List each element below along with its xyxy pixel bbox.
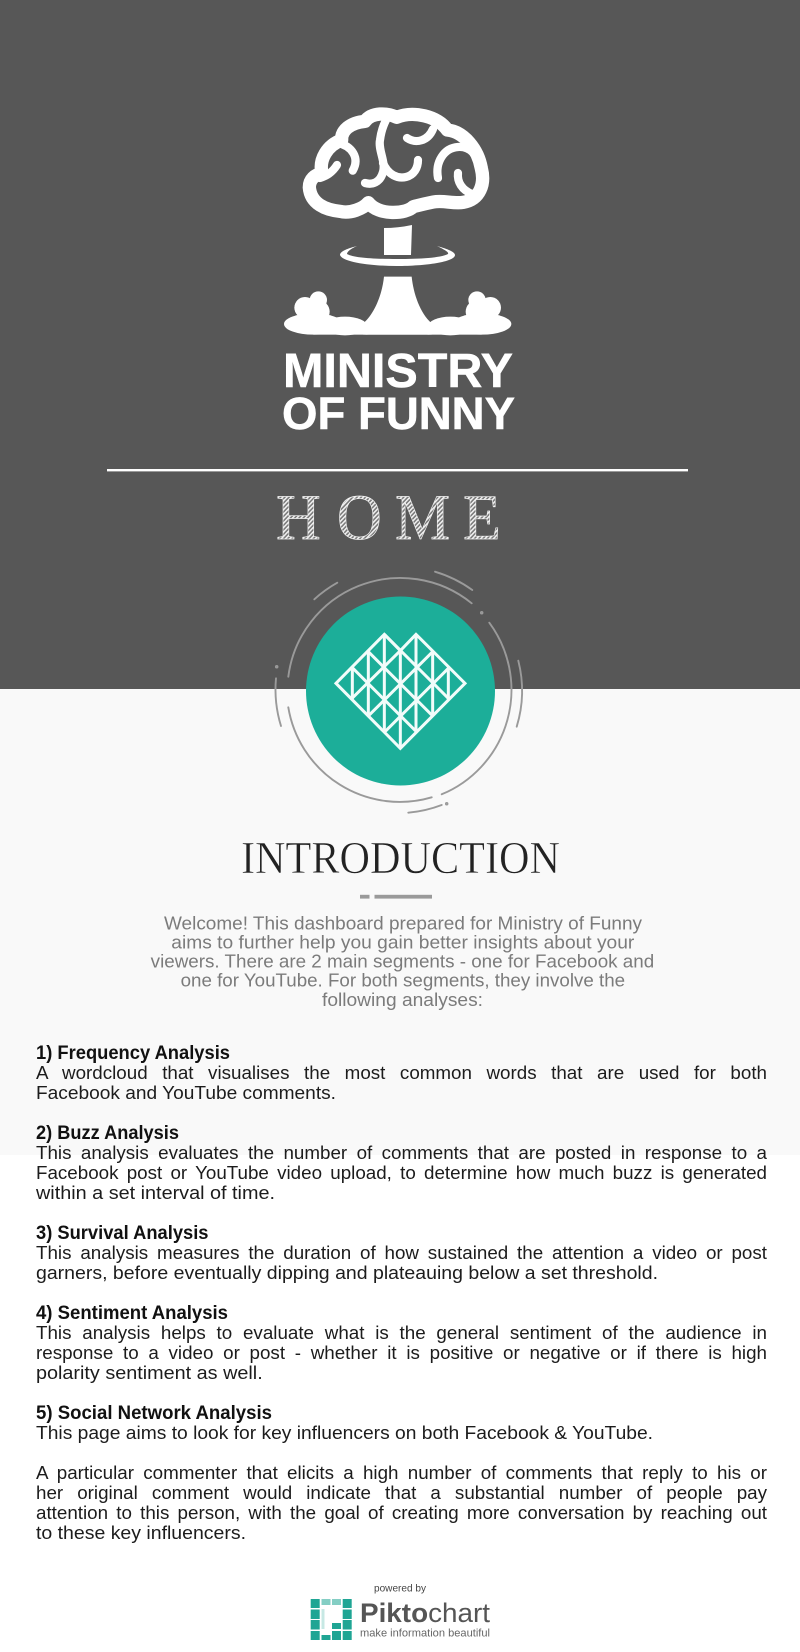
heading: HOME: HOME — [276, 481, 501, 553]
text block: key influencers paragraph — [36, 1463, 767, 1543]
panel: light background — [0, 689, 800, 1155]
tagline: make information beautiful — [360, 1628, 490, 1640]
logo text: OF FUNNY: OF FUNNY — [282, 388, 515, 439]
logo text: MINISTRY: MINISTRY — [283, 345, 513, 398]
text block: social network analysis: 5) Social Network Analysis — [36, 1403, 272, 1424]
text block: welcome paragraph — [151, 912, 654, 1010]
heading: INTRODUCTION: INTRODUCTION — [241, 832, 560, 883]
text block: sentiment analysis: 4) Sentiment Analysis — [36, 1303, 228, 1324]
panel: dark header background — [0, 0, 800, 689]
text block: sentiment analysis — [36, 1303, 767, 1383]
text block: frequency analysis: 1) Frequency Analysis — [36, 1043, 230, 1064]
icon: diamond lattice — [336, 634, 465, 748]
powered by label: powered by — [374, 1582, 427, 1594]
text block: buzz analysis: within a set interval of time. — [35, 1182, 275, 1203]
text block: frequency analysis: Facebook and YouTube comments. — [36, 1082, 336, 1103]
logo: Ministry of Funny — [282, 114, 515, 439]
icon: Piktochart mark — [311, 1599, 352, 1640]
text block: survival analysis: 3) Survival Analysis — [36, 1223, 208, 1244]
footer: Piktochart logo — [311, 1582, 491, 1640]
text block: welcome paragraph: aims to further help you gain better insights about your — [171, 932, 634, 952]
accent dashes — [360, 895, 432, 899]
text block: buzz analysis — [35, 1123, 767, 1203]
text block: welcome paragraph: one for YouTube. For both segments, they involve the — [181, 970, 625, 990]
text block: survival analysis: garners, before eventually dipping and plateauing below a set threshold. — [36, 1262, 658, 1283]
icon: teal circle — [306, 596, 495, 786]
icon: brain mushroom cloud — [284, 114, 511, 335]
text block: frequency analysis — [36, 1043, 767, 1103]
text block: welcome paragraph: Welcome! This dashboard prepared for Ministry of Funny — [164, 912, 643, 934]
text block: welcome paragraph: viewers. There are 2 main segments - one for Facebook and — [151, 950, 654, 972]
text block: sentiment analysis: polarity sentiment as well. — [36, 1362, 263, 1383]
text block: welcome paragraph: following analyses: — [322, 989, 483, 1010]
divider line — [107, 469, 688, 471]
text block: social network analysis — [36, 1403, 653, 1443]
icon: rings around circle — [275, 572, 522, 813]
text block: key influencers paragraph: to these key influencers. — [36, 1522, 246, 1543]
text block: buzz analysis: 2) Buzz Analysis — [36, 1123, 179, 1144]
text block: survival analysis — [36, 1223, 767, 1283]
text block: social network analysis: This page aims to look for key influencers on both Facebook & YouTube. — [36, 1422, 653, 1443]
wordmark: Piktochart: Piktochart — [360, 1598, 491, 1628]
